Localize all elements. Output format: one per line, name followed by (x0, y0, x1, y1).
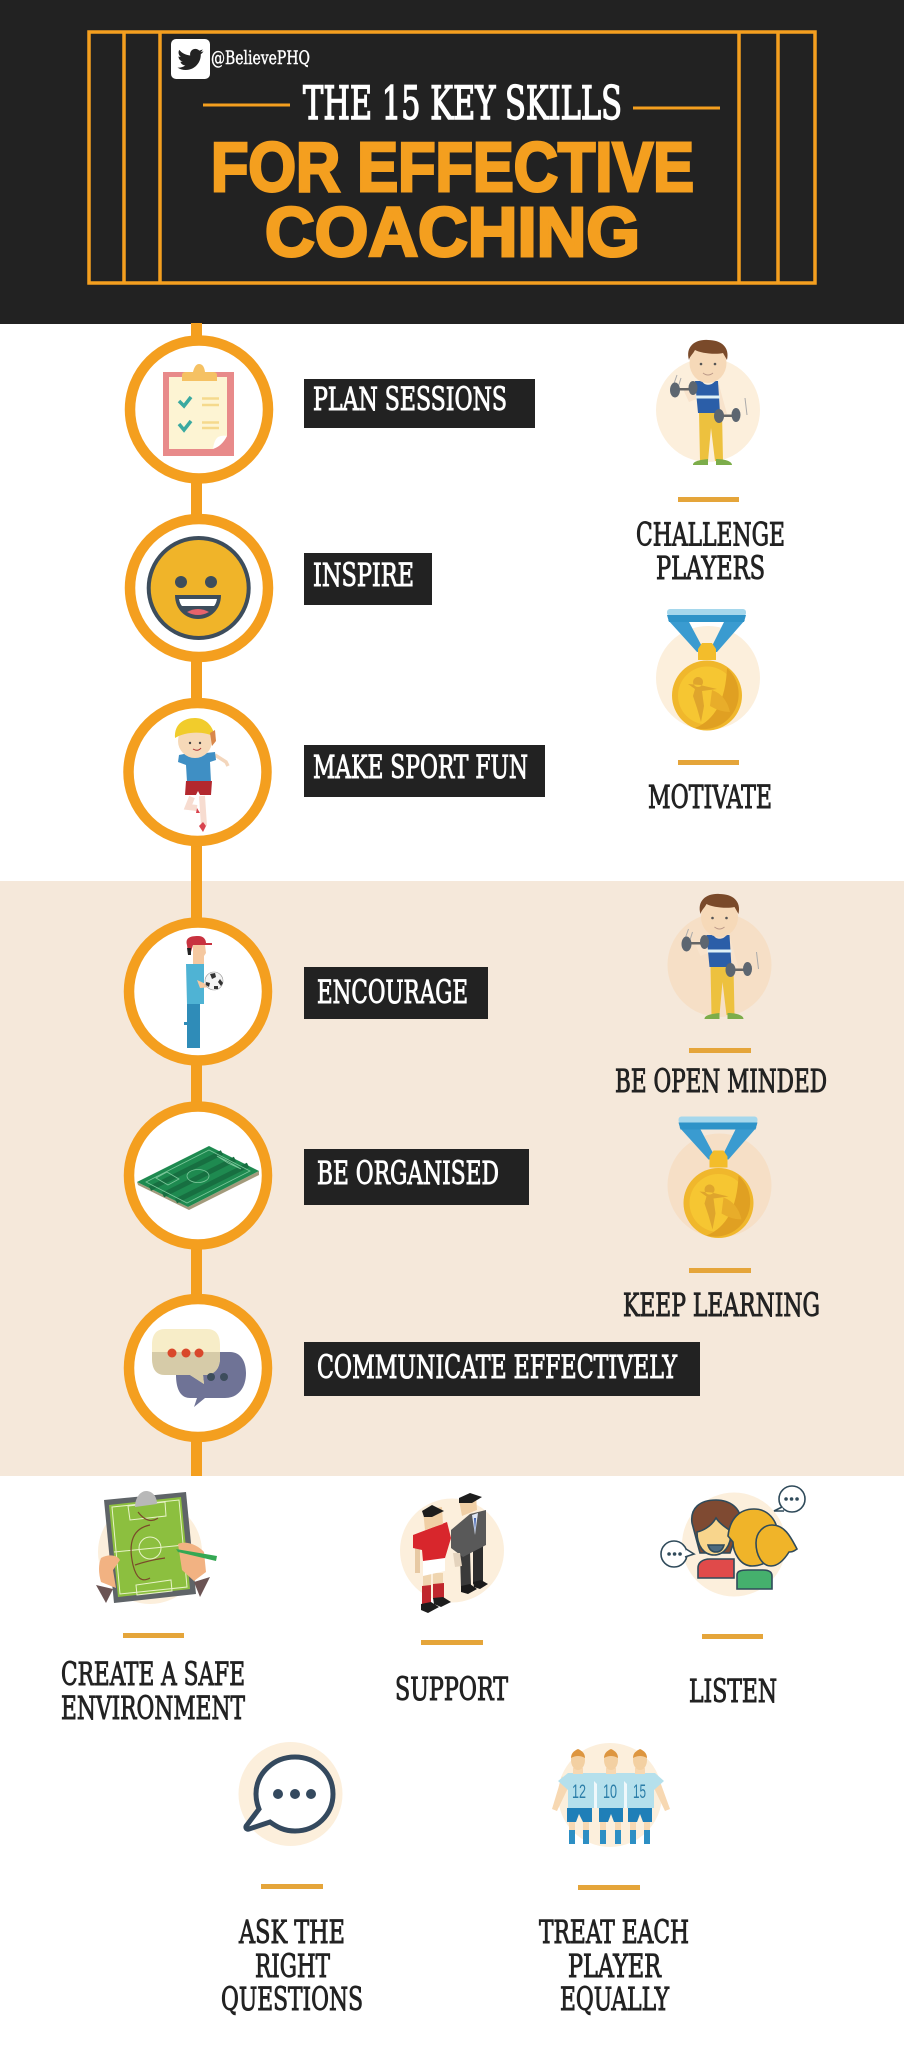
icon: two people talking (661, 1486, 805, 1589)
label: LISTEN (689, 1672, 777, 1710)
label: MOTIVATE (648, 778, 772, 816)
icon: three players: 10 (603, 1782, 617, 1803)
icon: smiley (149, 538, 249, 638)
label: SUPPORT (395, 1670, 508, 1708)
label: PLAYERS (656, 549, 765, 587)
divider (678, 497, 739, 502)
skill: plan sessions (130, 340, 535, 478)
title line 2: FOR EFFECTIVE (211, 128, 694, 206)
label (636, 516, 785, 587)
title line 3: COACHING (265, 193, 640, 271)
divider (689, 1268, 751, 1273)
twitter badge (171, 39, 310, 79)
icon: speech bubble (246, 1757, 333, 1831)
icon: three players (552, 1749, 670, 1844)
skill: be organised (129, 1106, 529, 1244)
label: be organised (304, 1149, 529, 1205)
label: plan sessions (304, 379, 535, 428)
label (539, 1913, 689, 2018)
label: communicate effectively (304, 1342, 700, 1396)
divider (678, 760, 739, 765)
icon: three players: 15 (633, 1782, 646, 1803)
icon: football pitch (137, 1146, 259, 1210)
divider (421, 1640, 483, 1645)
label: inspire (304, 553, 432, 605)
label: communicate effectively: COMMUNICATE EFFECTIVELY (317, 1348, 678, 1386)
label: make sport fun: MAKE SPORT FUN (313, 748, 528, 786)
label: CREATE A SAFE (61, 1655, 245, 1693)
icon: speech bubbles (152, 1329, 246, 1407)
label: plan sessions: PLAN SESSIONS (313, 380, 507, 418)
skill: challenge players (636, 340, 785, 587)
label: be organised: BE ORGANISED (317, 1154, 499, 1192)
header panel (0, 0, 904, 324)
label: CHALLENGE (636, 516, 785, 554)
timeline spine (191, 323, 202, 1476)
label: PLAYER (568, 1947, 662, 1985)
title line 1: THE 15 KEY SKILLS (303, 76, 622, 130)
skill: create a safe environment (61, 1491, 245, 1727)
label: BE OPEN MINDED (615, 1062, 827, 1100)
skill: be open minded (615, 894, 827, 1100)
divider (689, 1048, 751, 1053)
label: ASK THE (238, 1913, 345, 1951)
skill: make sport fun (128, 703, 545, 841)
icon: weightlifter (682, 894, 758, 1019)
divider (123, 1633, 184, 1638)
label: ENVIRONMENT (61, 1689, 245, 1727)
label: KEEP LEARNING (623, 1286, 820, 1324)
label: QUESTIONS (221, 1980, 363, 2018)
icon: clipboard (163, 364, 234, 456)
icon: weightlifter (670, 340, 747, 465)
skill: ask the right questions (221, 1742, 363, 2018)
skill: communicate effectively (129, 1299, 700, 1437)
skill: encourage (129, 922, 488, 1060)
icon: tactics board (96, 1491, 217, 1603)
icon: medal (678, 1116, 758, 1238)
divider (702, 1634, 763, 1639)
icon: running child (175, 718, 228, 832)
label: RIGHT (255, 1947, 330, 1985)
header frame (89, 32, 815, 283)
icon: medal (667, 609, 746, 730)
divider (261, 1884, 323, 1889)
skill: treat each player equally (539, 1743, 689, 2018)
label: EQUALLY (560, 1980, 670, 2018)
label (61, 1655, 245, 1727)
icon: coach with ball (184, 936, 223, 1048)
label: TREAT EACH (539, 1913, 689, 1951)
skill: listen (661, 1486, 805, 1710)
skill: support (395, 1493, 508, 1708)
label: encourage: ENCOURAGE (317, 973, 468, 1011)
label: make sport fun (304, 745, 545, 797)
icon: player and manager (413, 1493, 488, 1613)
label: inspire: INSPIRE (313, 556, 414, 594)
label (221, 1913, 363, 2018)
icon: three players: 12 (572, 1782, 586, 1803)
skill: keep learning (623, 1116, 820, 1324)
beige band panel (0, 881, 904, 1476)
skill: inspire (130, 519, 432, 657)
skill: motivate (648, 609, 772, 816)
label: encourage (304, 967, 488, 1019)
divider (578, 1885, 640, 1890)
twitter badge: @BelievePHQ (211, 47, 310, 69)
